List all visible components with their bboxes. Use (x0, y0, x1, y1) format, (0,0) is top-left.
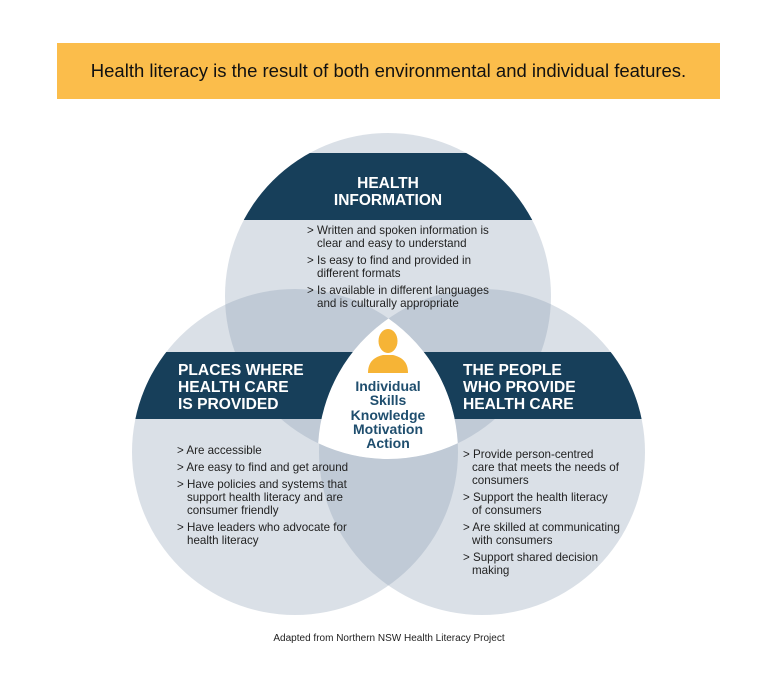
bullets: places (177, 444, 348, 547)
center text: Motivation (353, 421, 423, 437)
bullets: people: of consumers (472, 504, 542, 517)
bullets: health information: clear and easy to understand (317, 237, 467, 250)
banner: people: HEALTH CARE (463, 396, 574, 413)
bullets: health information: > Is easy to find and provided in (307, 254, 471, 267)
bullets: people (463, 448, 620, 577)
bullets: places: > Are accessible (177, 444, 262, 457)
circles (132, 133, 645, 615)
bullets: places: consumer friendly (187, 504, 279, 517)
title banner (57, 43, 720, 99)
venn diagram (132, 133, 645, 643)
bullets: people: making (472, 564, 509, 577)
title banner: Health literacy is the result of both environmental and individual features. (91, 60, 686, 81)
bullets: health information (307, 224, 489, 310)
bullets: people: care that meets the needs of (472, 461, 620, 474)
banner: health information: HEALTH (357, 175, 419, 192)
banner: health information (244, 153, 532, 220)
banner: health information: INFORMATION (334, 192, 442, 209)
bullets: people: consumers (472, 474, 529, 487)
bullets: health information: different formats (317, 267, 401, 280)
bullets: places: > Have policies and systems that (177, 478, 348, 491)
bullets: places: support health literacy and are (187, 491, 343, 504)
icon: person (368, 329, 408, 373)
bullets: people: > Support the health literacy (463, 491, 608, 504)
center text: Skills (370, 392, 406, 408)
banner: people: THE PEOPLE (463, 362, 562, 379)
bullets: people: with consumers (471, 534, 553, 547)
bullets: people: > Support shared decision (463, 551, 598, 564)
banner: people: WHO PROVIDE (463, 379, 576, 396)
bullets: places: > Have leaders who advocate for (177, 521, 347, 534)
bullets: people: > Are skilled at communicating (463, 521, 620, 534)
bullets: health information: > Written and spoken information is (307, 224, 489, 237)
center text: Individual (355, 378, 421, 394)
center white region (318, 318, 458, 459)
bullets: people: > Provide person-centred (463, 448, 594, 461)
banner: places: PLACES WHERE (178, 362, 304, 379)
bullets: places: health literacy (187, 534, 259, 547)
bullets: health information: and is culturally appropriate (317, 297, 459, 310)
footer credit: Adapted from Northern NSW Health Literacy Project (273, 633, 505, 644)
bullets: health information: > Is available in different languages (307, 284, 489, 297)
banner: places (135, 352, 353, 419)
center text: Action (366, 435, 410, 451)
banner: places: HEALTH CARE (178, 379, 289, 396)
center text (351, 378, 426, 451)
bullets: places: > Are easy to find and get around (177, 461, 348, 474)
banner: places: IS PROVIDED (178, 396, 279, 413)
banner: people (424, 352, 642, 419)
center text: Knowledge (351, 407, 426, 423)
